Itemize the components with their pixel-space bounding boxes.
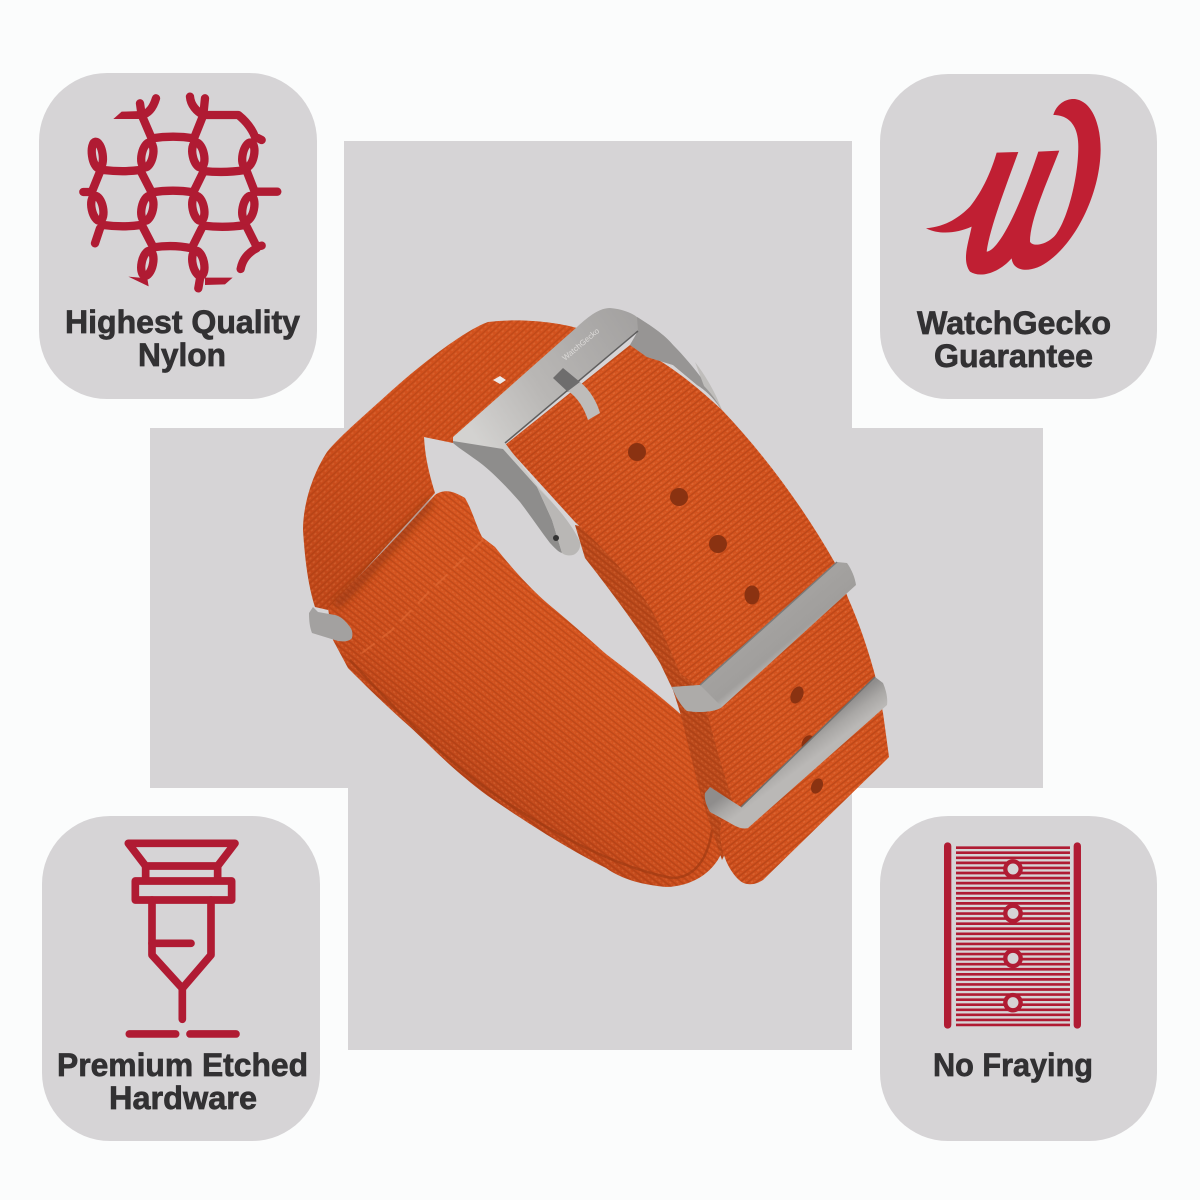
- central grey backdrop: [150, 141, 1043, 1050]
- keeper loop left: [309, 607, 352, 641]
- strap lower wrap: [328, 491, 722, 887]
- icon: WatchGecko W logo: [926, 99, 1101, 275]
- label: Guarantee: [934, 338, 1093, 374]
- label: No Fraying: [933, 1047, 1093, 1083]
- label: [917, 305, 1111, 374]
- keeper loop upper: [672, 562, 856, 712]
- strap front band: [505, 345, 889, 884]
- label: Hardware: [109, 1080, 257, 1116]
- keeper loop lower: [705, 677, 887, 829]
- label: Highest Quality: [65, 304, 300, 340]
- card: Highest Quality Nylon: [39, 73, 317, 399]
- strap holes: [628, 443, 825, 796]
- card: No Fraying: [880, 816, 1157, 1141]
- label: Premium Etched: [57, 1047, 308, 1083]
- label: [65, 304, 300, 373]
- icon: laser etcher: [128, 843, 236, 1034]
- product photo: orange nylon strap: [303, 308, 889, 887]
- icon: woven strap with holes: [948, 846, 1077, 1025]
- strap back loop: [303, 320, 577, 610]
- card: WatchGecko Guarantee: [880, 74, 1157, 399]
- label: Nylon: [138, 337, 226, 373]
- buckle: WatchGecko: [561, 326, 602, 363]
- label: [57, 1047, 308, 1116]
- strap under layer: [575, 525, 760, 860]
- icon: woven nylon net: [83, 97, 277, 288]
- card: Premium Etched Hardware: [42, 816, 320, 1141]
- buckle: [453, 308, 722, 556]
- label: WatchGecko: [917, 305, 1111, 341]
